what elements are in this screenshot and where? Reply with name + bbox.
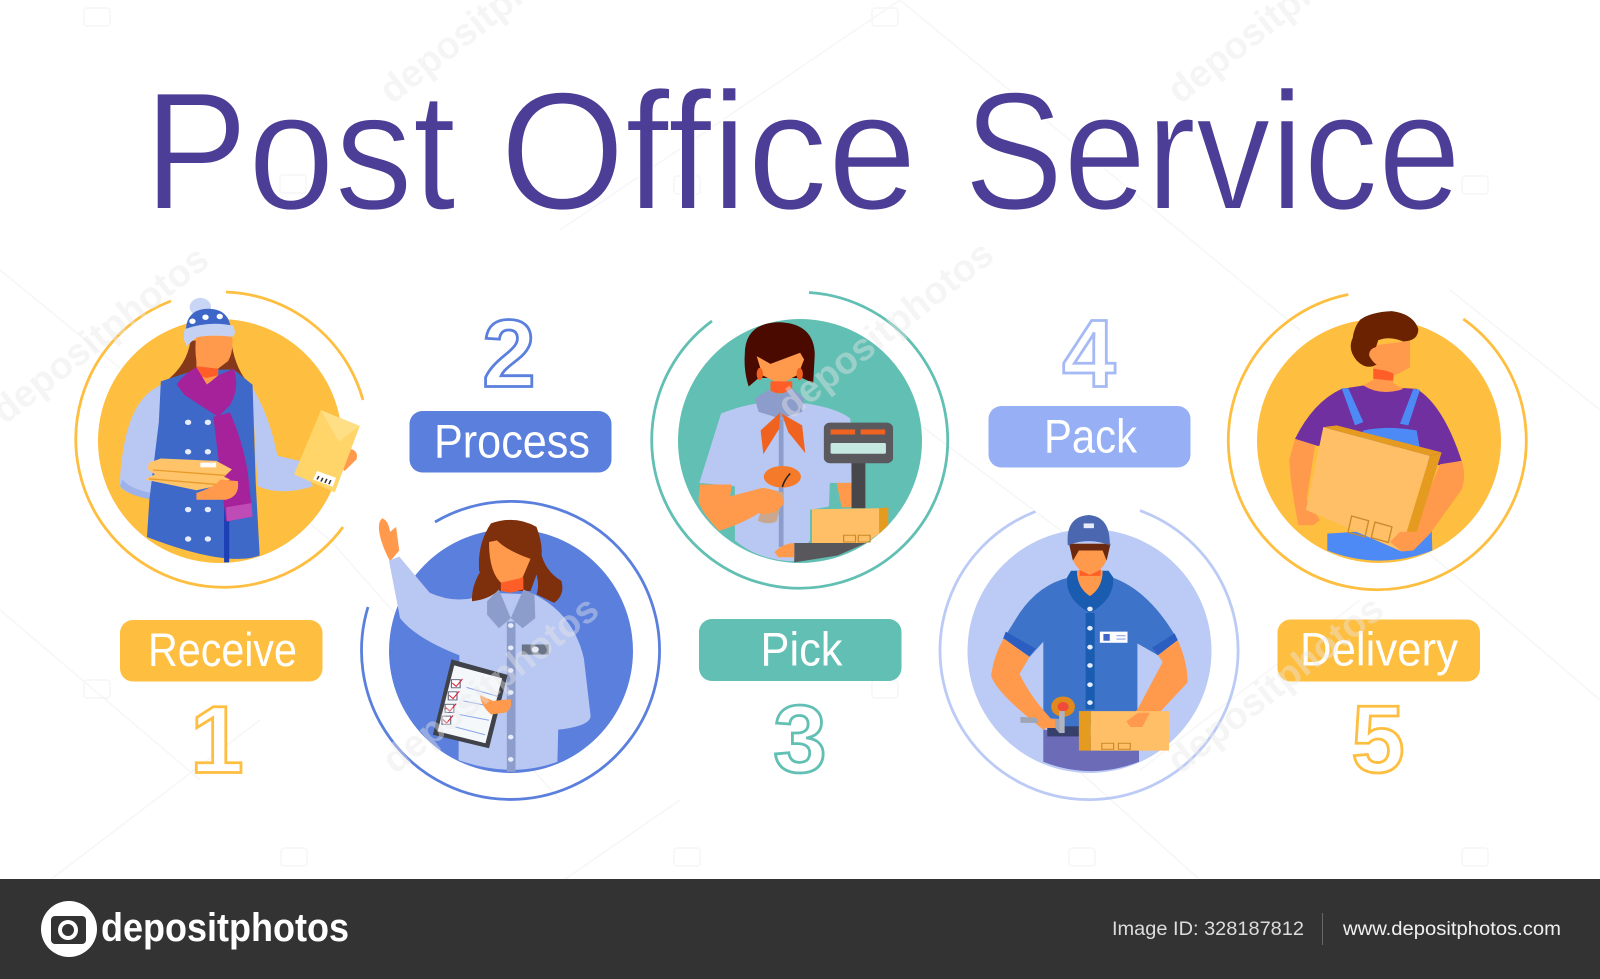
figure: courier carrying box	[1289, 311, 1464, 561]
logo wordmark: depositphotos	[101, 906, 349, 950]
ring 1	[76, 292, 363, 587]
title	[144, 57, 1461, 245]
watermarks: depositphotos	[1160, 588, 1392, 782]
ring 3	[652, 292, 948, 588]
website: www.depositphotos.com	[1342, 918, 1561, 940]
number 2: 2	[482, 300, 536, 408]
title: Service	[964, 57, 1461, 245]
figure: woman in winter coat with parcels	[120, 298, 360, 562]
figure: packer with tape gun	[991, 515, 1188, 771]
watermarks: depositphotos	[375, 588, 607, 782]
circle 4 background	[968, 529, 1212, 773]
watermarks: depositphotos	[770, 233, 1002, 427]
panel: step 2 process	[362, 501, 660, 799]
panel: step 1 receive	[76, 292, 363, 587]
title: Office	[500, 57, 917, 245]
number 1: 1	[190, 686, 244, 794]
number 5: 5	[1351, 686, 1405, 793]
ring 2	[362, 501, 660, 799]
image id: Image ID: 328187812	[1112, 918, 1304, 940]
panel: step 4 pack	[940, 511, 1238, 800]
pill: pick	[699, 619, 902, 681]
circle 1 background	[98, 319, 342, 563]
ring 5	[1228, 294, 1526, 590]
pill: pack	[988, 406, 1190, 468]
panel: step 3 pick	[652, 292, 948, 588]
number 4: 4	[1062, 300, 1116, 408]
ring 4	[940, 511, 1238, 800]
panel: step 5 delivery	[1228, 294, 1526, 590]
pill: process: Process	[434, 414, 590, 468]
pill: delivery: Delivery	[1300, 622, 1458, 676]
watermarks	[0, 0, 1392, 782]
icon: camera logo	[41, 901, 97, 957]
figure: cashier with scanner and scale	[699, 322, 893, 562]
circle 2 background	[389, 529, 633, 773]
pill: pack: Pack	[1044, 410, 1137, 462]
title: Post	[144, 57, 456, 245]
pill: pick: Pick	[760, 622, 843, 676]
pill: receive: Receive	[148, 623, 297, 676]
number 3: 3	[773, 686, 827, 793]
footer bar	[0, 879, 1600, 979]
circle 5 background	[1257, 319, 1501, 563]
circle 3 background	[678, 319, 922, 563]
figure: clerk with clipboard	[379, 518, 591, 772]
